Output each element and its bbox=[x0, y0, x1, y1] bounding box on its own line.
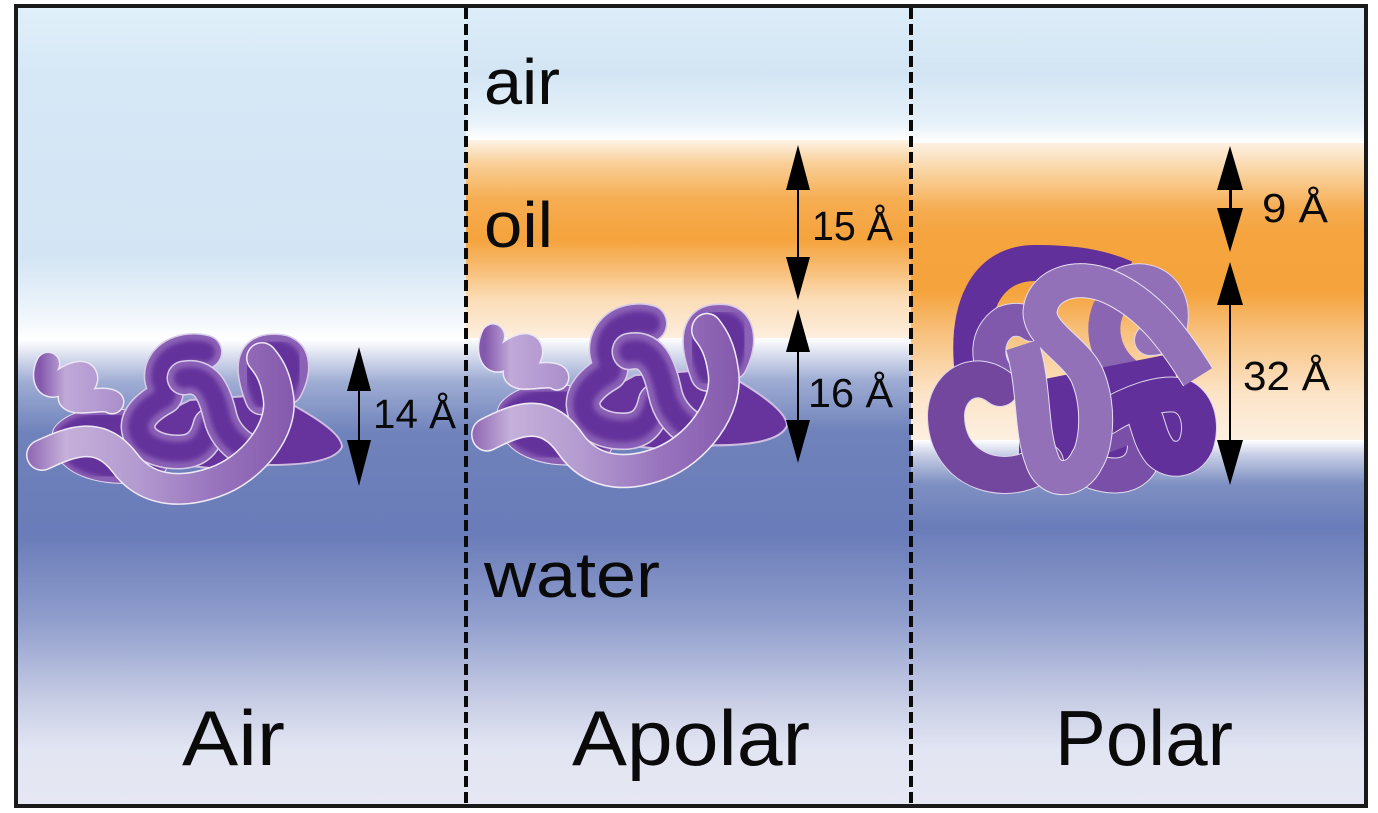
label: water: water bbox=[483, 539, 660, 611]
heading: Apolar: Apolar bbox=[572, 694, 810, 782]
label: 32 angstrom: 32 Å bbox=[1243, 353, 1331, 399]
label: oil: oil bbox=[484, 189, 553, 261]
arrow: 16 angstrom bbox=[786, 309, 810, 463]
protein: air panel bbox=[42, 351, 342, 489]
panel: air bbox=[18, 8, 466, 805]
label: 15 angstrom: 15 Å bbox=[812, 203, 894, 249]
dashed divider: air / apolar bbox=[464, 8, 468, 805]
dashed divider: apolar / polar bbox=[909, 8, 913, 805]
arrow: 9 angstrom bbox=[1217, 146, 1243, 252]
label: 16 angstrom: 16 Å bbox=[808, 370, 894, 416]
label: 14 angstrom: 14 Å bbox=[373, 391, 457, 437]
heading: Polar: Polar bbox=[1055, 694, 1233, 782]
panel: polar bbox=[911, 8, 1365, 805]
panel: apolar bbox=[466, 8, 911, 805]
arrow: 32 angstrom bbox=[1217, 262, 1243, 485]
protein: polar panel bbox=[946, 263, 1199, 480]
arrow: 14 angstrom bbox=[347, 347, 371, 486]
heading: Air: Air bbox=[182, 694, 285, 782]
protein: apolar panel bbox=[487, 322, 787, 471]
arrow: 15 angstrom bbox=[786, 145, 810, 300]
label: air: air bbox=[484, 46, 560, 118]
label: 9 angstrom: 9 Å bbox=[1262, 185, 1329, 231]
